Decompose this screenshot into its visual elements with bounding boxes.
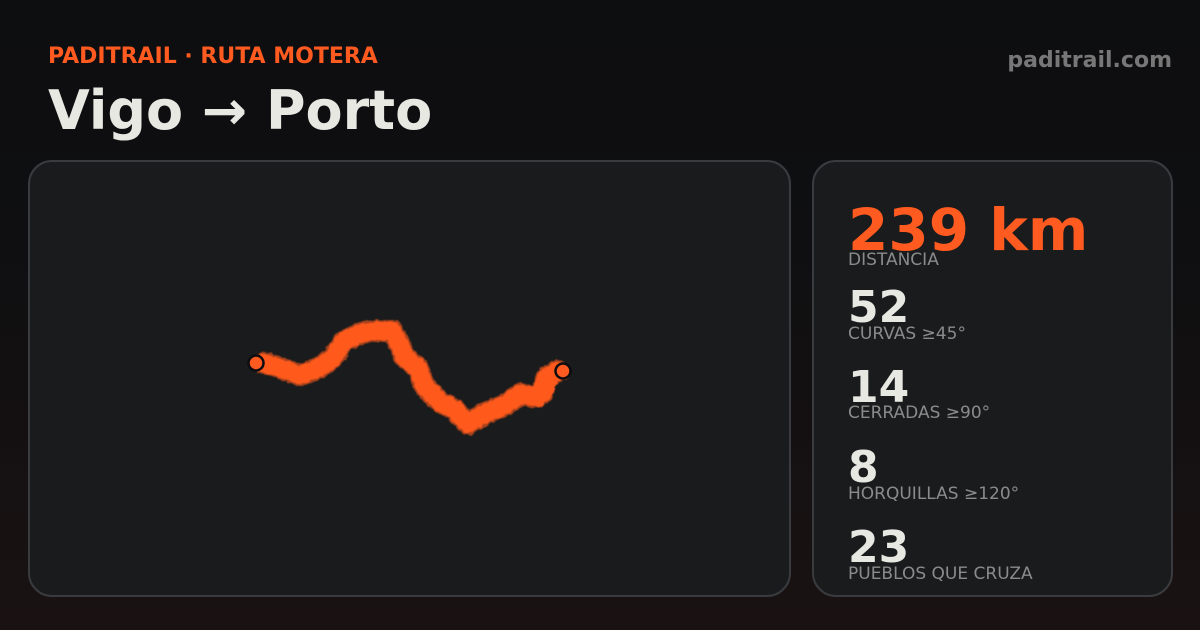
stat: tight curves label: CERRADAS ≥90° bbox=[848, 403, 990, 423]
stat: towns value: 23 bbox=[848, 522, 909, 573]
eyebrow heading: PADITRAIL · RUTA MOTERA bbox=[48, 44, 378, 69]
route line bbox=[264, 331, 558, 424]
stat: hairpins label: HORQUILLAS ≥120° bbox=[848, 484, 1019, 504]
stat: curves label: CURVAS ≥45° bbox=[848, 324, 966, 344]
stat: distance label: DISTANCIA bbox=[848, 250, 939, 270]
site domain: paditrail.com bbox=[1007, 48, 1172, 73]
stat: curves value: 52 bbox=[848, 282, 909, 333]
panel: stats bbox=[812, 160, 1173, 597]
end marker bbox=[556, 364, 570, 378]
stat: distance value: 239 km bbox=[848, 196, 1088, 264]
start marker bbox=[248, 356, 264, 370]
title: Vigo → Porto bbox=[48, 79, 432, 142]
stat: tight curves value: 14 bbox=[848, 362, 909, 413]
stat: hairpins value: 8 bbox=[848, 442, 879, 493]
panel: route map bbox=[28, 160, 791, 597]
stat: towns label: PUEBLOS QUE CRUZA bbox=[848, 564, 1033, 584]
